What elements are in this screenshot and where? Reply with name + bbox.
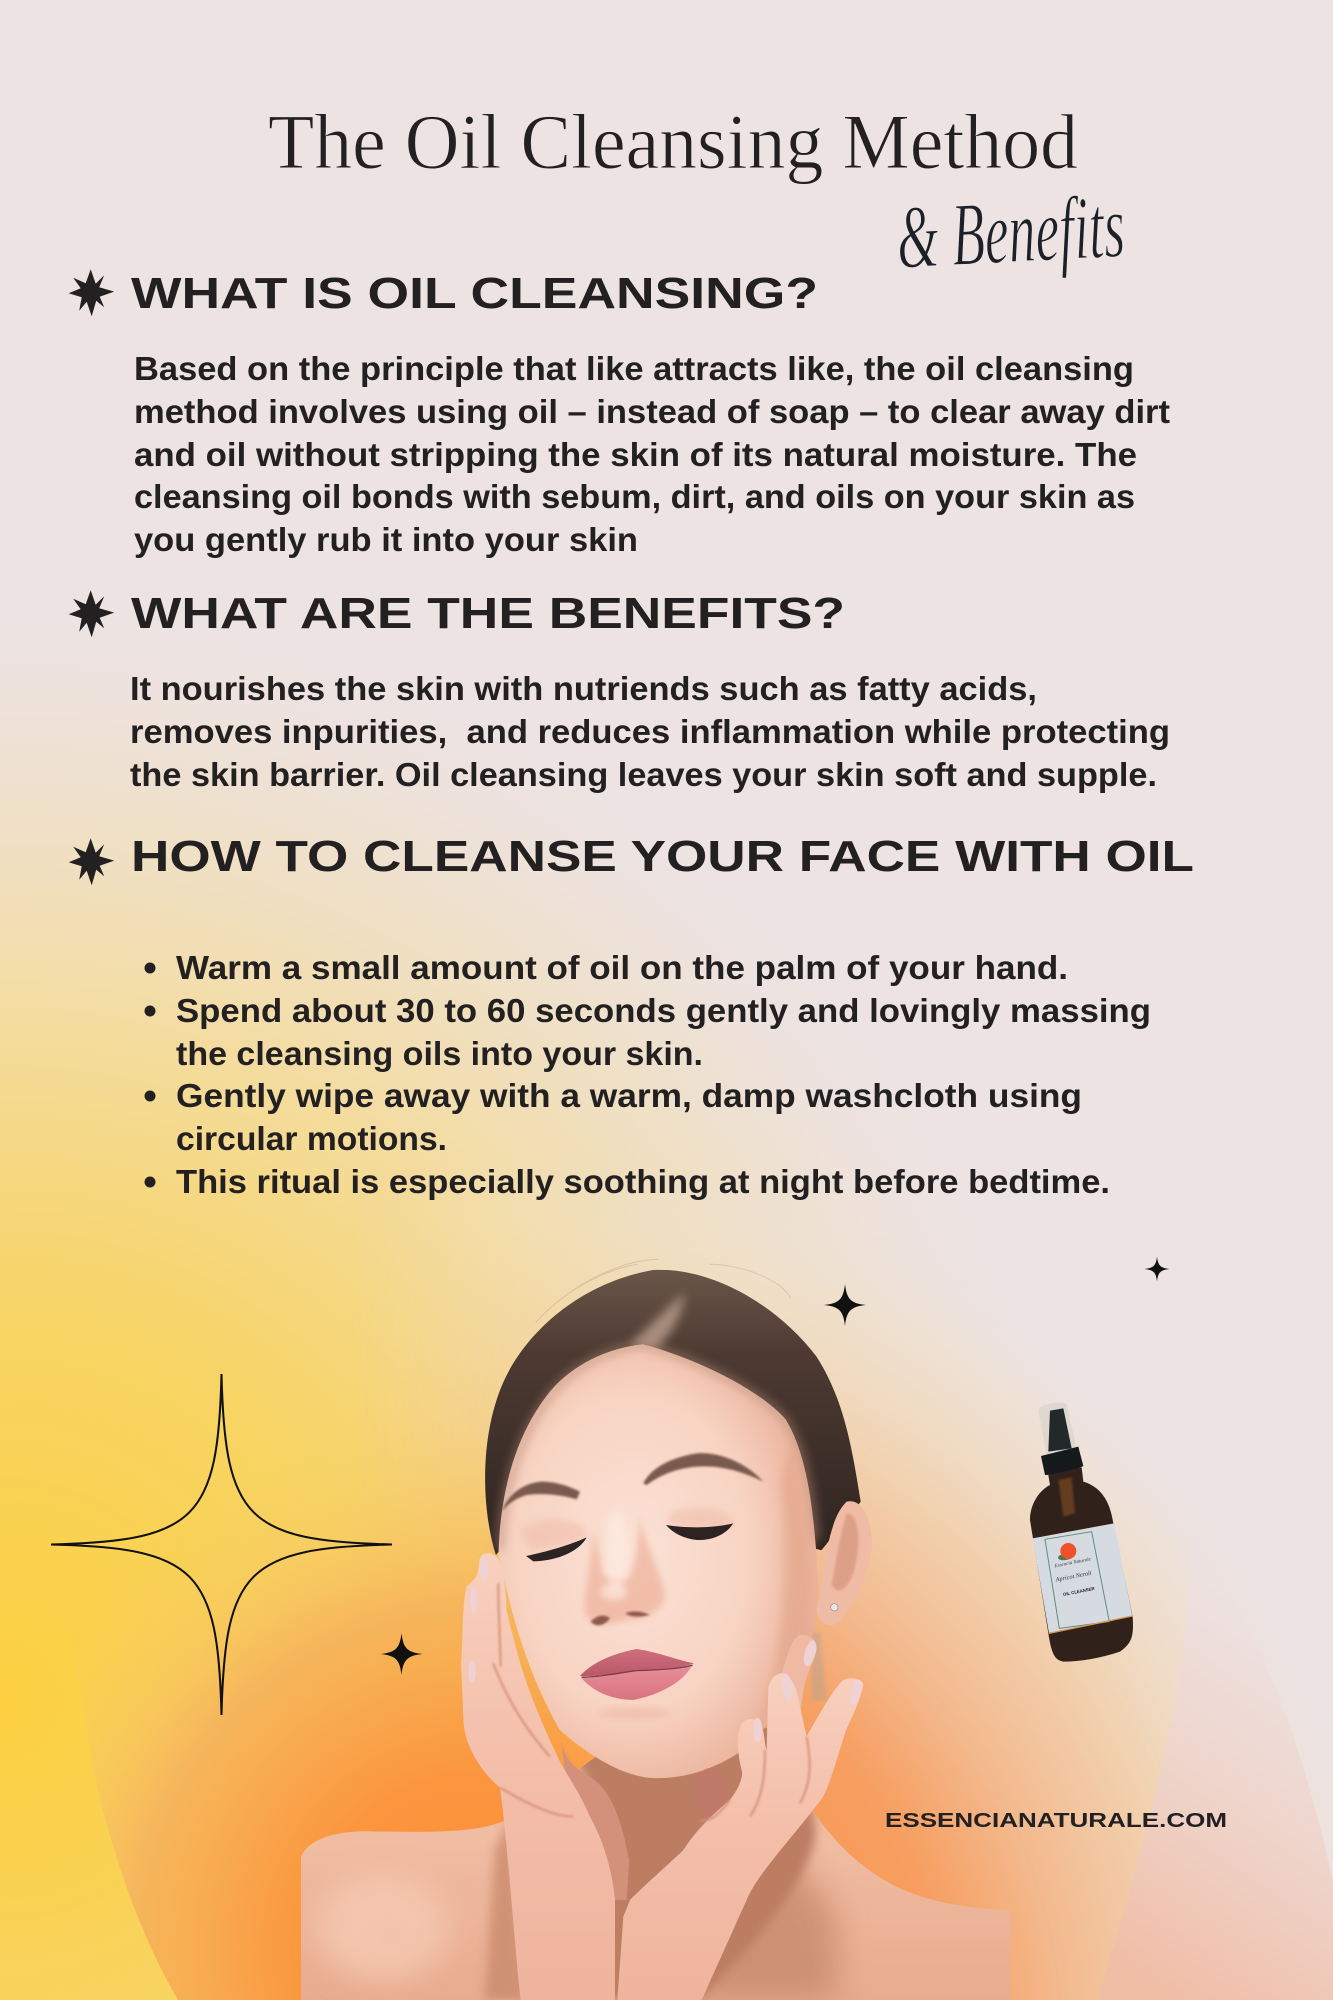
label type: OIL CLEANSER bbox=[1063, 1586, 1096, 1597]
photo: woman with closed eyes bbox=[301, 1259, 1010, 2000]
label bbox=[1033, 1523, 1132, 1633]
bullet list: circular motions. bbox=[176, 1120, 447, 1157]
under-lip shadow bbox=[597, 1707, 670, 1719]
right hand bbox=[617, 1673, 863, 2000]
nose highlight bbox=[606, 1510, 627, 1590]
head, hair and shoulders bbox=[301, 1259, 1010, 2000]
left eyebrow bbox=[502, 1482, 580, 1512]
hair bbox=[485, 1270, 861, 1555]
website url: ESSENCIANATURALE.COM bbox=[885, 1810, 1227, 1832]
eyelid shading bbox=[520, 1507, 733, 1550]
right cheek shading bbox=[753, 1444, 811, 1739]
bullet list: Gently wipe away with a warm, damp washcloth using bbox=[176, 1077, 1082, 1114]
label product name: Apricot Neroli bbox=[1054, 1570, 1092, 1584]
ear bbox=[817, 1501, 872, 1625]
left hand palm interior bbox=[560, 1733, 629, 1900]
left hand finger creases bbox=[493, 1583, 573, 1817]
label orange edge bbox=[1049, 1616, 1132, 1633]
body text: removes inpurities, and reduces inflammation while protecting bbox=[130, 713, 1170, 750]
label frame bbox=[1045, 1532, 1109, 1628]
body text: method involves using oil – instead of soap – to clear away dirt bbox=[134, 393, 1170, 430]
bullet list: Spend about 30 to 60 seconds gently and lovingly massing bbox=[176, 992, 1151, 1029]
ear inner shadow bbox=[832, 1513, 858, 1590]
section: what are the benefits bbox=[69, 589, 1170, 793]
label text: Essencia Naturale bbox=[1053, 1557, 1092, 1569]
facial features and hands bbox=[461, 1453, 872, 2000]
right eyebrow bbox=[643, 1453, 763, 1485]
body text: the skin barrier. Oil cleansing leaves your skin soft and supple. bbox=[130, 756, 1157, 793]
shoulders and neck bbox=[301, 1725, 1010, 2000]
lip parting line bbox=[582, 1665, 693, 1677]
body text: and oil without stripping the skin of its natural moisture. The bbox=[134, 436, 1137, 473]
background gradient bbox=[0, 699, 1333, 2000]
chin finger behind neck bbox=[694, 1768, 727, 1819]
bullet list: Warm a small amount of oil on the palm of your hand. bbox=[176, 949, 1068, 986]
pump collar bbox=[1041, 1447, 1083, 1475]
icon: burst star bbox=[69, 590, 114, 637]
hairline soft shadow bbox=[500, 1345, 815, 1550]
body text: you gently rub it into your skin bbox=[134, 521, 638, 558]
right hand finger creases bbox=[700, 1737, 810, 1821]
nose side shading bbox=[585, 1517, 665, 1624]
left eyelashes bbox=[526, 1537, 587, 1561]
body text: It nourishes the skin with nutriends such as fatty acids, bbox=[130, 670, 1037, 707]
bullet list: This ritual is especially soothing at night before bedtime. bbox=[176, 1163, 1110, 1200]
blue-grey hair wisps by neck bbox=[811, 1633, 827, 1700]
face bbox=[498, 1344, 817, 1778]
left hand bbox=[461, 1553, 615, 2000]
icon: small sparkle top bbox=[824, 1284, 866, 1326]
bottle body bbox=[1030, 1467, 1133, 1662]
right hand back finger bbox=[782, 1635, 817, 1717]
earring bbox=[831, 1604, 838, 1611]
body text bbox=[130, 670, 1170, 793]
icon: burst star bbox=[69, 838, 114, 885]
nostrils bbox=[591, 1612, 650, 1625]
script subtitle: & Benefits: & Benefits bbox=[894, 177, 1127, 288]
amber glow bbox=[1058, 1477, 1075, 1517]
icon: tiny sparkle right bbox=[1144, 1256, 1170, 1282]
title: The Oil Cleansing Method bbox=[268, 98, 1078, 185]
upper lip bbox=[580, 1649, 694, 1676]
right eyelashes bbox=[666, 1523, 733, 1540]
pump top bbox=[1038, 1403, 1077, 1456]
section: what is oil cleansing bbox=[69, 269, 1170, 558]
section: how to cleanse bbox=[69, 832, 1194, 1200]
heading: WHAT ARE THE BENEFITS? bbox=[131, 589, 845, 638]
bullet list bbox=[144, 949, 1151, 1200]
icon: small sparkle left bbox=[380, 1633, 422, 1675]
icon: burst star bbox=[69, 269, 114, 316]
heading: WHAT IS OIL CLEANSING? bbox=[131, 269, 818, 318]
pump tube bbox=[1048, 1408, 1072, 1452]
hair parting highlight bbox=[630, 1292, 684, 1351]
photo: oil cleanser bottle bbox=[1030, 1403, 1133, 1662]
lower lip bbox=[582, 1667, 691, 1700]
flower logo bbox=[1058, 1543, 1076, 1561]
body text: Based on the principle that like attracts like, the oil cleansing bbox=[134, 350, 1134, 387]
nose tip highlight bbox=[601, 1583, 627, 1600]
heading: HOW TO CLEANSE YOUR FACE WITH OIL bbox=[131, 832, 1194, 881]
body text bbox=[134, 350, 1170, 558]
icon: large outline sparkle bbox=[51, 1374, 392, 1715]
body text: cleansing oil bonds with sebum, dirt, and oils on your skin as bbox=[134, 478, 1135, 515]
bullet list: the cleansing oils into your skin. bbox=[176, 1035, 703, 1072]
fly-away hair strands bbox=[536, 1259, 791, 1322]
fingernails bbox=[468, 1558, 864, 1742]
body shading bbox=[316, 1700, 837, 2000]
